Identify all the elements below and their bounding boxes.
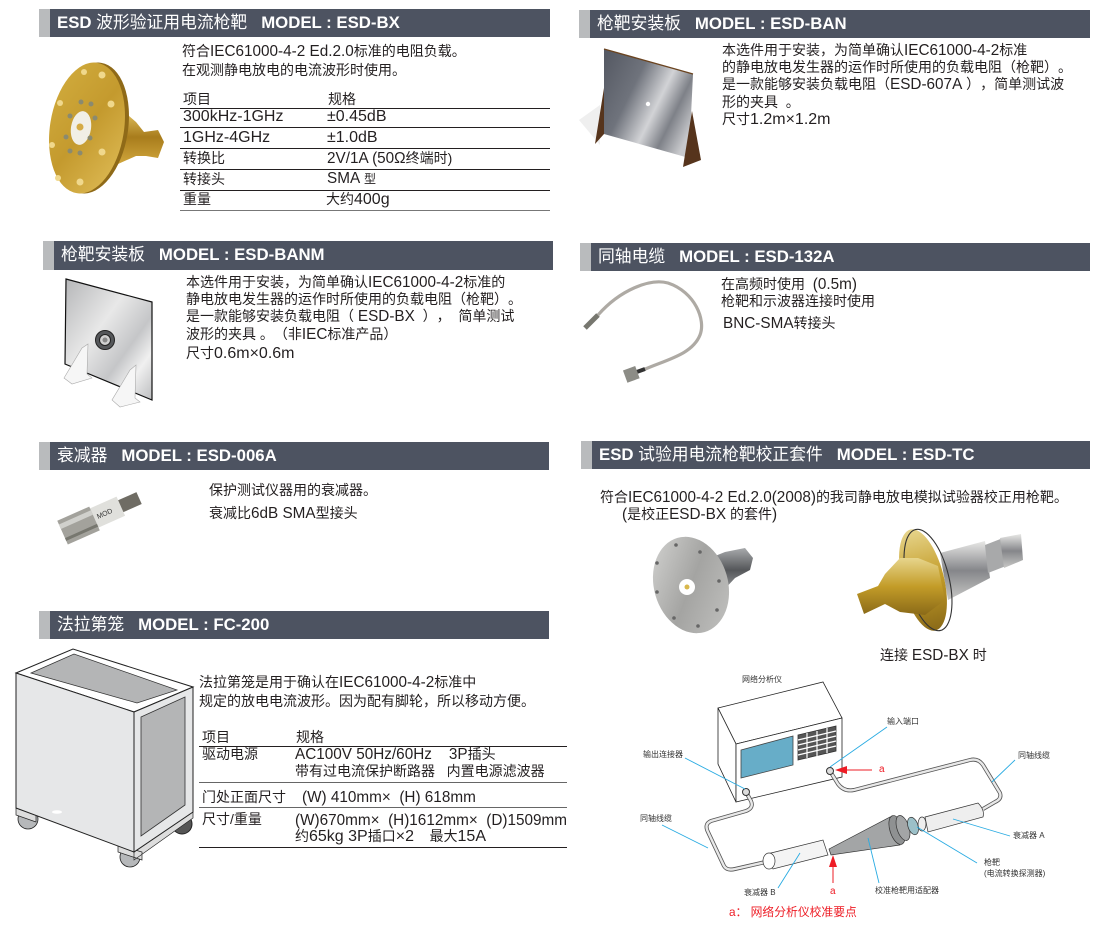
table: specifications: 驱动电源 — [202, 746, 258, 762]
table: specifications: 门处正面尺寸 — [202, 789, 286, 805]
table: specifications: 尺寸/重量 — [202, 811, 262, 827]
labels: 衰减器 B — [744, 887, 776, 897]
heading: ESD-TC — [581, 441, 1090, 469]
labels: 枪靶 — [984, 857, 1000, 867]
icon: adapter and attenuators — [763, 803, 983, 869]
labels: red a: a — [830, 886, 836, 897]
table: specifications: 项目 — [183, 91, 211, 107]
panel: ESD-BANM — [43, 241, 553, 408]
heading: ESD-BX — [39, 9, 550, 37]
text: red legend: a： 网络分析仪校准要点 — [729, 905, 857, 919]
text: caption: 连接 ESD-BX 时 — [880, 647, 987, 664]
table: specifications: 项目 — [202, 729, 230, 745]
panel: ESD-006A — [39, 442, 549, 544]
photo: brass calibration adapter — [857, 528, 1023, 632]
labels: 输入端口 — [887, 716, 919, 726]
table: specifications: 大约400g — [326, 191, 390, 208]
labels: 衰减器 A — [1013, 830, 1045, 840]
table: specifications: AC100V 50Hz/60Hz 3P插头 — [295, 746, 496, 763]
heading: ESD-BAN — [579, 10, 1090, 38]
text: description: 本选件用于安装，为简单确认IEC61000-4-2标准 的静电放电发生器的运作时所使用的负载电阻（枪靶）。 是一款能够安装负载电阻（ESD-607A ），简单测试波 形的夹具 。 尺寸1.2m×1.2m — [722, 42, 1072, 128]
table: specifications: ±0.45dB — [327, 108, 386, 125]
illustration: Faraday cage — [14, 648, 194, 868]
text: description: 保护测试仪器用的衰减器。 — [209, 482, 377, 498]
callout lines — [662, 727, 1015, 888]
cable: right — [830, 760, 1000, 809]
text: description: 符合IEC61000-4-2 Ed.2.0标准的电阻负载。 在观测静电放电的电流波形时使用。 — [182, 43, 466, 78]
heading: ESD-BX: ESD 波形验证用电流枪靶 MODEL : ESD-BX — [57, 13, 400, 32]
heading: ESD-132A: 同轴电缆 MODEL : ESD-132A — [598, 247, 835, 266]
icon: network analyzer — [718, 682, 842, 802]
labels: red a: a — [879, 764, 885, 775]
table: specifications — [180, 91, 550, 211]
table: specifications: (W)670mm× (H)1612mm× (D)1509mm — [295, 812, 567, 829]
text: description: 符合IEC61000-4-2 Ed.2.0(2008)的我司静电放电模拟试验器校正用枪靶。 — [600, 489, 1068, 506]
labels — [640, 674, 1050, 897]
table: specifications: ±1.0dB — [327, 129, 378, 146]
text: ratio: 衰减比6dB SMA型接头 — [209, 505, 358, 522]
heading: ESD-TC: ESD 试验用电流枪靶校正套件 MODEL : ESD-TC — [599, 445, 974, 464]
text: note: (是校正ESD-BX 的套件) — [622, 506, 777, 523]
labels: 网络分析仪 — [742, 674, 782, 684]
table: specifications: 300kHz-1GHz — [183, 108, 283, 125]
diagram: network analyzer calibration — [640, 674, 1050, 919]
labels: 输出连接器 — [643, 749, 683, 759]
wheels — [18, 809, 140, 867]
table: specifications: (W) 410mm× (H) 618mm — [302, 789, 476, 806]
photo: small mounting plate — [64, 278, 153, 408]
heading: ESD-BANM: 枪靶安装板 MODEL : ESD-BANM — [61, 245, 325, 264]
panel: ESD-BX — [39, 9, 550, 211]
heading: ESD-006A — [39, 442, 549, 470]
photo: target mounting plate — [579, 48, 701, 167]
photo: attenuator: MOD — [96, 508, 114, 521]
table: specifications: 规格 — [328, 91, 356, 107]
table: specifications: SMA 型 — [327, 170, 376, 187]
labels: (电流转换探测器) — [984, 868, 1046, 878]
text: connector: BNC-SMA转接头 — [723, 315, 836, 332]
table: specifications: 1GHz-4GHz — [183, 129, 270, 146]
labels: 校准枪靶用适配器 — [875, 885, 939, 895]
text: description: 本选件用于安装，为简单确认IEC61000-4-2标准的 静电放电发生器的运作时所使用的负载电阻（枪靶）。 是一款能够安装负载电阻（ ESD-BX ）， 简单测试 波形的夹具 。（非IEC标准产品） — [186, 274, 522, 343]
labels: red a — [830, 764, 885, 897]
photo: silver calibration target — [653, 536, 753, 634]
heading: FC-200 — [39, 611, 549, 639]
table: specifications: 转接头 — [183, 171, 225, 187]
heading: ESD-BAN: 枪靶安装板 MODEL : ESD-BAN — [597, 14, 847, 33]
text: size: 尺寸0.6m×0.6m — [186, 345, 294, 362]
table: specifications: 规格 — [296, 729, 324, 745]
heading: ESD-132A — [580, 243, 1090, 271]
heading: ESD-BANM — [43, 241, 553, 270]
panel: ESD-TC — [581, 441, 1090, 919]
table: specifications: 约65kg 3P插口×2 最大15A — [295, 828, 486, 845]
panel: ESD-BAN — [579, 10, 1090, 167]
table: specifications — [199, 729, 567, 848]
photo: coaxial cable — [583, 280, 704, 383]
cable: left — [707, 792, 770, 870]
table: specifications: 2V/1A (50Ω终端时) — [327, 150, 452, 167]
table: specifications: 重量 — [183, 191, 211, 207]
heading: ESD-006A: 衰减器 MODEL : ESD-006A — [57, 446, 277, 465]
arrows: red calibration points — [829, 766, 872, 883]
text: description: 在高频时使用 (0.5m) 枪靶和示波器连接时使用 — [721, 276, 875, 309]
heading: FC-200: 法拉第笼 MODEL : FC-200 — [57, 615, 269, 634]
text: description: 法拉第笼是用于确认在IEC61000-4-2标准中 规定的放电电流波形。因为配有脚轮，所以移动方便。 — [199, 674, 535, 709]
labels: 同轴线缆 — [1018, 750, 1050, 760]
panel: ESD-132A — [580, 243, 1090, 383]
photo: gold current target — [49, 62, 164, 194]
table: specifications: 带有过电流保护断路器 内置电源滤波器 — [295, 763, 545, 779]
panel: FC-200 — [14, 611, 567, 868]
photo: attenuator — [57, 492, 142, 544]
table: specifications: 转换比 — [183, 150, 225, 166]
labels: 同轴线缆 — [640, 813, 672, 823]
